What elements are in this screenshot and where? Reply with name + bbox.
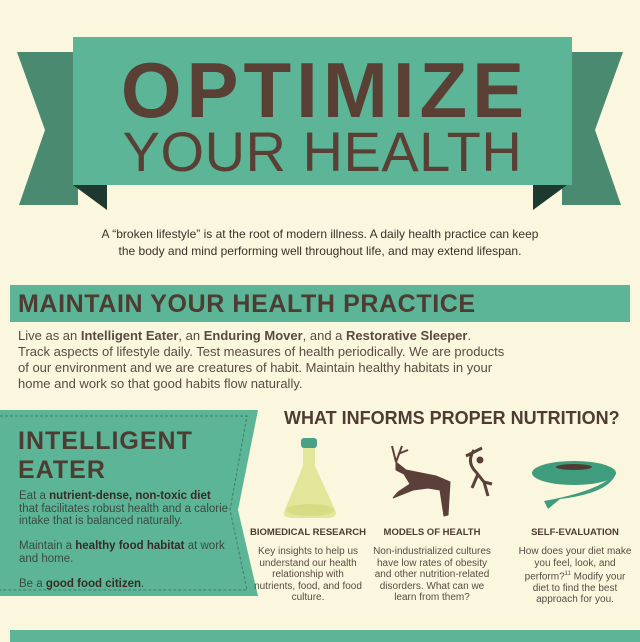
- column: self-evaluation: How does your diet make you feel, look, and perform?11 Modify your diet to find the best approach for you.: [519, 546, 631, 605]
- column: models of health: MODELS OF HEALTH: [384, 527, 480, 538]
- column: biomedical research: Key insights to help us understand our health relationship with nutrients, food, and food culture.: [254, 546, 362, 603]
- eater text: Be a good food citizen.: [19, 578, 144, 590]
- eater text: [19, 490, 228, 590]
- intro text: A “broken lifestyle” is at the root of modern illness. A daily health practice can keep the body and mind performing well throughout life, and may extend lifespan.: [102, 227, 538, 258]
- title banner: [17, 37, 623, 210]
- icon: deer and hunter: [391, 446, 492, 517]
- practice text: Live as an Intelligent Eater, an Enduring Mover, and a Restorative Sleeper.: [18, 328, 471, 343]
- section header bar: [10, 285, 630, 322]
- column: self-evaluation: SELF-EVALUATION: [531, 527, 619, 538]
- next section bar: [10, 630, 640, 642]
- heading: intelligent eater: EATER: [18, 456, 106, 484]
- heading: maintain your health practice: MAINTAIN YOUR HEALTH PRACTICE: [18, 290, 476, 318]
- column: models of health: Non-industrialized cultures have low rates of obesity and other nutrition-related disorders. What can we learn from them?: [373, 546, 491, 603]
- eater text: Maintain a healthy food habitat at work and home.: [19, 540, 225, 564]
- column: biomedical research: [250, 527, 366, 603]
- subtitle: your health: YOUR HEALTH: [123, 120, 522, 183]
- eater text: Eat a nutrient-dense, non-toxic diet that facilitates robust health and a calorie intake that is balanced naturally.: [19, 490, 228, 527]
- heading: intelligent eater: [18, 427, 193, 484]
- panel: intelligent eater: [0, 410, 258, 596]
- heading: what informs proper nutrition: WHAT INFORMS PROPER NUTRITION?: [284, 408, 620, 428]
- icon: flask: [284, 438, 336, 518]
- heading: intelligent eater: INTELLIGENT: [18, 427, 193, 455]
- practice text: Track aspects of lifestyle daily. Test measures of health periodically. We are products of our environment and we are creatures of habit. Maintain healthy habitats in your home and work so that good habits flow naturally.: [18, 344, 504, 391]
- column: biomedical research: BIOMEDICAL RESEARCH: [250, 527, 366, 538]
- icon: measuring tape: [532, 461, 616, 509]
- title: optimize: OPTIMIZE: [121, 46, 529, 134]
